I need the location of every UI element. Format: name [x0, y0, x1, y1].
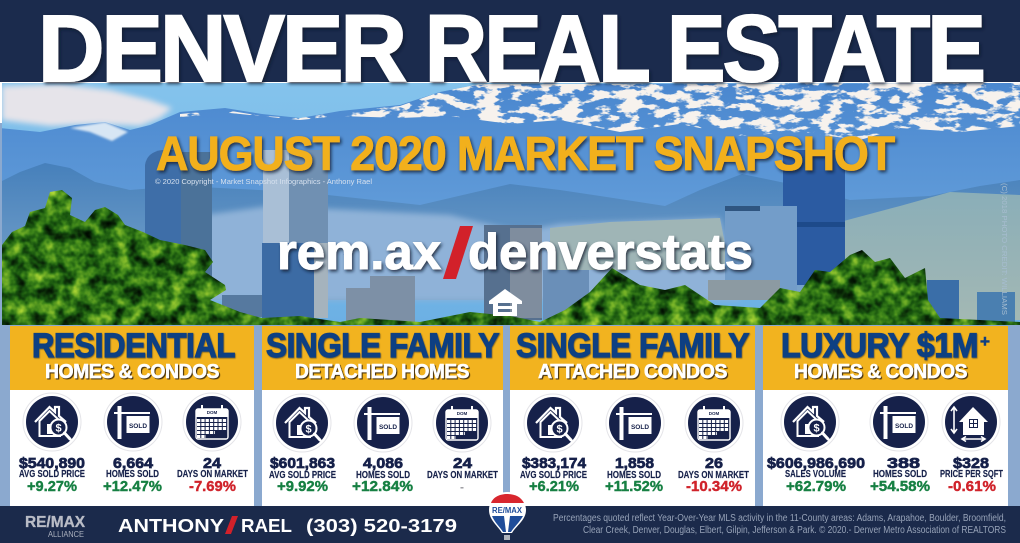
stat: days on market: -7.69% — [189, 479, 236, 495]
stat: homes sold: HOMES SOLD — [106, 469, 159, 480]
panel: residential — [10, 326, 254, 506]
heading: residential: RESIDENTIAL — [32, 327, 235, 365]
logo: RE/MAX Alliance: ALLIANCE — [48, 530, 84, 539]
stat: price per sqft: -0.61% — [948, 479, 996, 495]
footer band — [0, 506, 1020, 543]
stat: sales volume: +62.79% — [786, 479, 846, 495]
stat: days on market — [678, 394, 749, 495]
stat: homes sold — [870, 393, 930, 495]
stat: homes sold: 6,664 — [113, 455, 154, 472]
disclaimer — [553, 513, 1006, 536]
stat: avg sold price: AVG SOLD PRICE — [19, 469, 85, 480]
heading: single family: SINGLE FAMILY — [266, 327, 500, 365]
stat: homes sold: +12.84% — [352, 479, 413, 495]
subheading: ATTACHED CONDOS — [538, 361, 727, 383]
subheading: DETACHED HOMES — [295, 361, 469, 383]
subheading: HOMES & CONDOS — [794, 361, 967, 383]
stat: days on market: 24 — [453, 455, 473, 472]
stat: homes sold — [352, 394, 413, 495]
phone number: (303) 520-3179 — [306, 516, 457, 536]
stat: homes sold: 1,858 — [615, 455, 654, 472]
stat: homes sold — [605, 394, 664, 495]
stat: homes sold: 388 — [887, 455, 920, 472]
stat: avg sold price — [269, 394, 336, 495]
stat: homes sold: SOLD — [129, 423, 147, 430]
stat: homes sold: HOMES SOLD — [873, 469, 927, 480]
logo: RE/MAX Alliance — [25, 514, 85, 539]
stat: days on market: DAYS ON MARKET — [177, 469, 248, 480]
stat: avg sold price: AVG SOLD PRICE — [269, 470, 336, 481]
stat: days on market: DAYS ON MARKET — [678, 470, 749, 481]
url: rem.ax/denverstats: rem.ax — [277, 224, 441, 280]
stat: avg sold price: $601,863 — [270, 455, 335, 472]
stat: avg sold price — [520, 394, 587, 495]
stat: homes sold: SOLD — [379, 424, 397, 431]
stat: avg sold price: $540,890 — [19, 455, 85, 472]
stat: avg sold price: $383,174 — [522, 455, 587, 472]
heading: luxury $1M+: LUXURY $1M — [781, 327, 978, 365]
stat: days on market: 26 — [705, 455, 723, 472]
stat: homes sold: +12.47% — [103, 479, 162, 495]
stat: days on market — [427, 394, 498, 494]
agent name — [118, 516, 292, 536]
photo: Denver skyline and mountains — [0, 83, 1020, 327]
stat: price per sqft: $328 — [953, 455, 989, 472]
subtitle: AUGUST 2020 MARKET SNAPSHOT — [156, 128, 895, 181]
stat: homes sold: +54.58% — [870, 479, 930, 495]
agent name: RAEL — [241, 516, 292, 536]
stat: days on market: - — [460, 480, 464, 494]
agent name: ANTHONY — [118, 516, 224, 536]
stat: avg sold price: AVG SOLD PRICE — [520, 470, 587, 481]
url: rem.ax/denverstats — [277, 224, 753, 280]
stat: sales volume: $606,986,690 — [767, 455, 865, 472]
stat: sales volume: SALES VOLUME — [785, 469, 846, 480]
stat: days on market: -10.34% — [686, 479, 742, 495]
heading: single family: SINGLE FAMILY — [516, 327, 750, 365]
stat: homes sold: +11.52% — [605, 479, 663, 495]
stat: price per sqft — [940, 393, 1003, 495]
stat: homes sold: HOMES SOLD — [607, 470, 661, 481]
panel: luxury — [763, 326, 1008, 506]
url: rem.ax/denverstats: denverstats — [468, 224, 753, 280]
stat: days on market: 24 — [203, 455, 222, 472]
stat: days on market: DOM — [207, 410, 218, 415]
stat: days on market — [177, 393, 248, 495]
stat: homes sold: SOLD — [895, 423, 913, 430]
subheading: HOMES & CONDOS — [45, 361, 219, 383]
copyright note: © 2020 Copyright - Market Snapshot Infographics - Anthony Rael — [155, 177, 372, 186]
stat: days on market: DOM — [709, 411, 720, 416]
photo credit: (C) 2018 PHOTO CREDIT: WILLIAMS — [1000, 183, 1007, 315]
icon: RE/MAX balloon — [489, 492, 526, 540]
logo: RE/MAX Alliance: RE/MAX — [25, 514, 85, 531]
stat: days on market: DOM — [457, 411, 468, 416]
stat: homes sold: 4,086 — [363, 455, 403, 472]
icon: equal housing — [489, 289, 522, 316]
stat: homes sold — [103, 393, 162, 495]
stat: avg sold price: +9.27% — [27, 479, 77, 495]
stat: avg sold price — [19, 393, 85, 495]
stat: days on market: DAYS ON MARKET — [427, 470, 498, 481]
stat: avg sold price: +9.92% — [277, 479, 328, 495]
stat: avg sold price: +6.21% — [529, 479, 579, 495]
icon: RE/MAX balloon: RE/MAX — [492, 506, 523, 515]
header band — [0, 0, 1020, 123]
heading: luxury $1M+: + — [980, 332, 990, 351]
title — [38, 0, 983, 102]
panel: single family detached — [262, 326, 503, 506]
stat: homes sold: HOMES SOLD — [356, 470, 410, 481]
panel: single family attached — [510, 326, 755, 506]
stat: sales volume — [767, 393, 865, 495]
stat: homes sold: SOLD — [631, 424, 649, 431]
